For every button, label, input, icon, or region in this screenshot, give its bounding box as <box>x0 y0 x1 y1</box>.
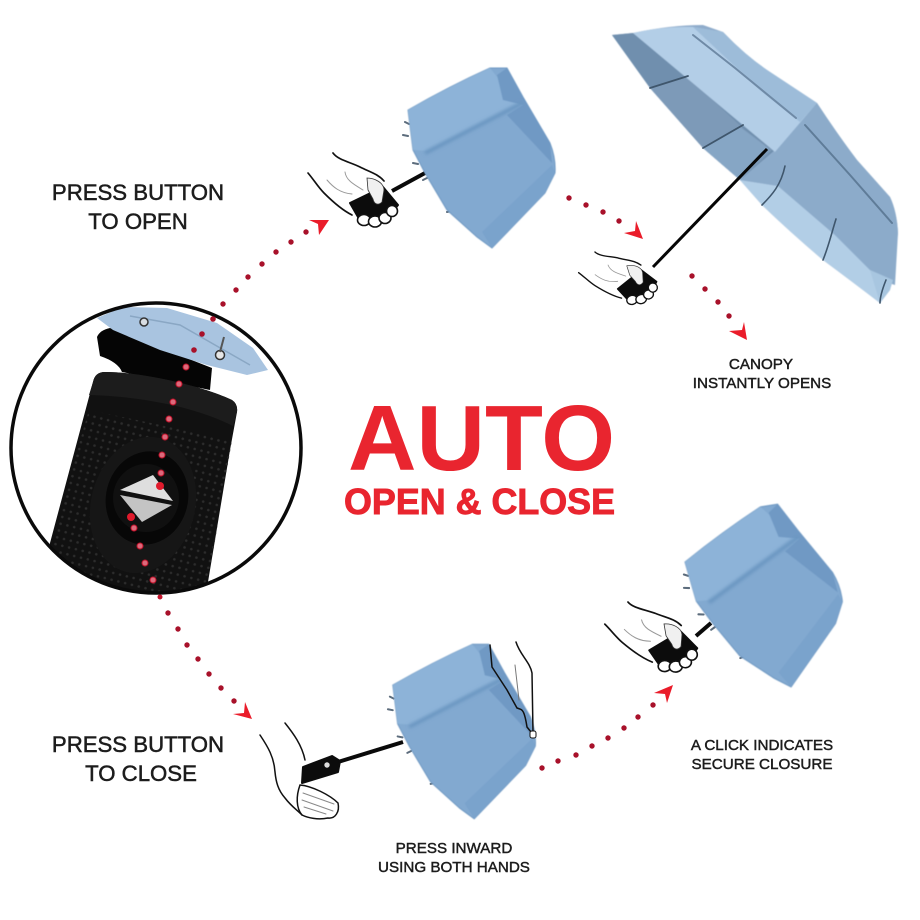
label: press button to close <box>52 732 224 786</box>
label: canopy instantly opens: CANOPY <box>729 356 793 373</box>
inset dots <box>127 316 216 600</box>
circular inset: handle button closeup <box>10 302 302 600</box>
label: press inward using both hands <box>378 840 530 876</box>
canopy <box>612 25 898 303</box>
subtitle: open and close: OPEN & CLOSE <box>344 481 615 522</box>
title: auto: AUTO <box>348 386 615 490</box>
dotted arrow: button to first umbrella <box>220 220 329 307</box>
closed umbrella with both hands: press inward <box>260 642 536 819</box>
label: press button to open: PRESS BUTTON <box>52 180 224 205</box>
closed umbrella with hand: step one <box>308 68 555 248</box>
label: press button to close: TO CLOSE <box>85 761 197 786</box>
canopy ribs <box>650 35 892 303</box>
dotted arrow: button to closing step <box>165 610 252 719</box>
label: press inward using both hands: PRESS INWARD <box>396 840 512 857</box>
label: press inward using both hands: USING BOTH HANDS <box>378 859 530 876</box>
open umbrella with hand <box>575 25 898 316</box>
label: press button to open <box>52 180 224 234</box>
label: canopy instantly opens: INSTANTLY OPENS <box>693 375 831 392</box>
label: a click indicates secure closure: A CLICK INDICATES <box>691 737 833 754</box>
dotted arrow: press to click <box>539 685 673 771</box>
handle top disc <box>97 307 268 375</box>
handle neck <box>97 328 212 390</box>
closed umbrella with hand: secure closure <box>603 497 854 701</box>
button diamond emblem <box>120 475 173 522</box>
dotted arrow: first umbrella to open umbrella <box>566 195 643 239</box>
button grip <box>302 756 340 783</box>
label: canopy instantly opens <box>693 356 831 392</box>
open palm hand <box>260 723 338 819</box>
label: press button to open: TO OPEN <box>88 209 188 234</box>
inset outline <box>11 303 301 593</box>
label: a click indicates secure closure <box>691 737 833 773</box>
dotted arrow: to canopy opens <box>689 273 747 340</box>
title <box>344 386 615 522</box>
pressing hand <box>490 642 536 738</box>
label: a click indicates secure closure: SECURE CLOSURE <box>692 756 832 773</box>
handle grip <box>40 372 237 600</box>
label: press button to close: PRESS BUTTON <box>52 732 224 757</box>
